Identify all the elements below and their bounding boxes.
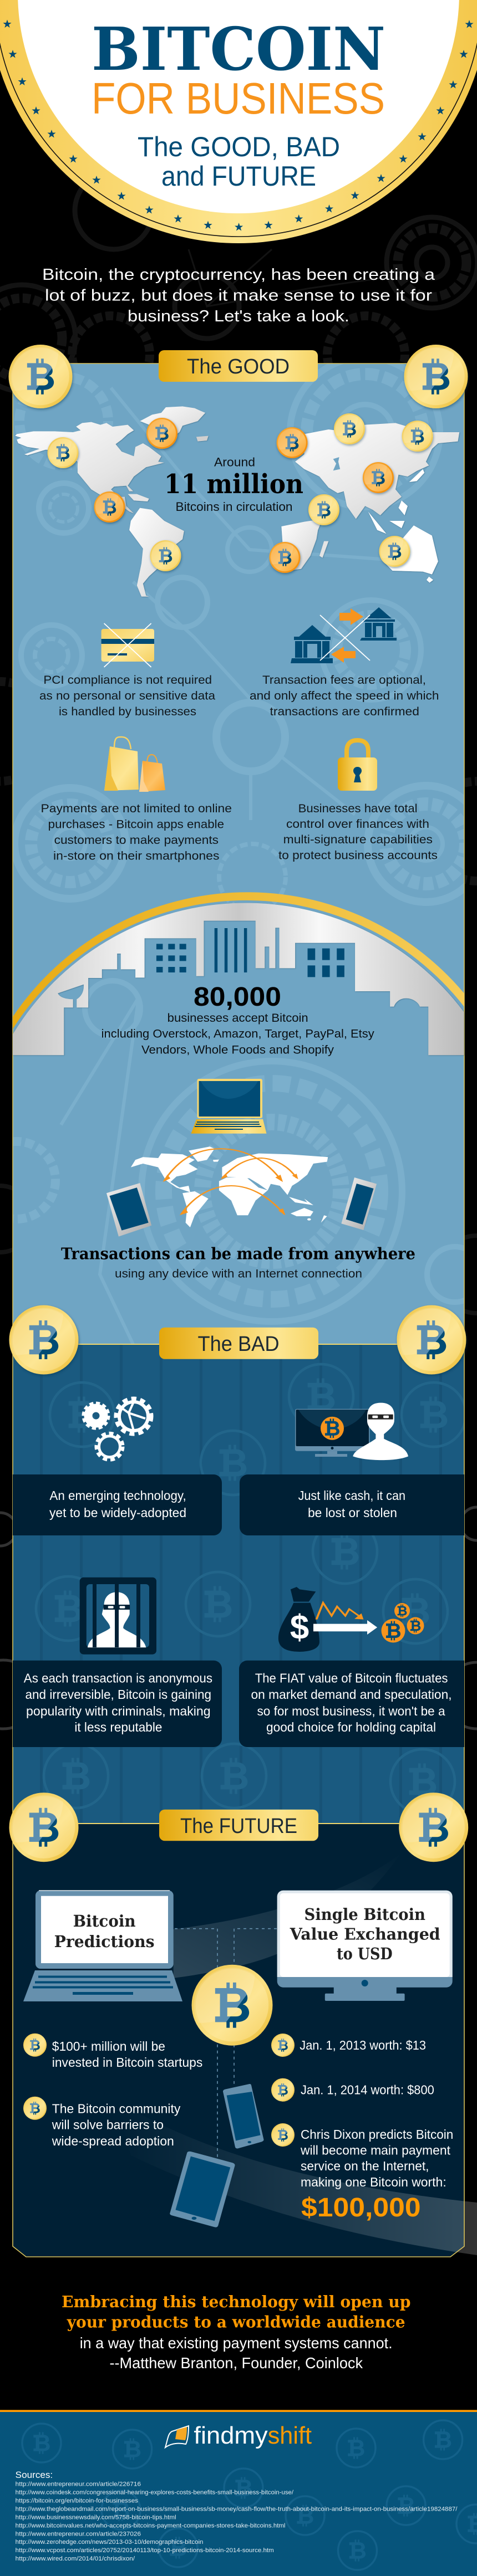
section header: the future: The FUTURE	[180, 1815, 297, 1838]
logo: findmyshift: findmy	[194, 2422, 268, 2449]
text: total control: to protect business accounts	[278, 849, 438, 862]
box: lost or stolen: be lost or stolen	[308, 1505, 397, 1520]
stat: 11 million: Bitcoins in circulation	[175, 500, 293, 514]
closing quote	[62, 2292, 410, 2372]
text: transaction fees: transactions are confirmed	[270, 705, 419, 718]
monitor: single bitcoin value: to USD	[337, 1944, 393, 1963]
title: FOR BUSINESS: FOR BUSINESS	[92, 74, 385, 123]
sources: http://www.entrepreneur.com/article/237026	[16, 2531, 141, 2538]
monitor: single bitcoin value: Value Exchanged	[290, 1925, 440, 1944]
title coin	[0, 0, 477, 243]
heading: transactions from anywhere: Transactions can be made from anywhere	[61, 1245, 415, 1263]
laptop: bitcoin predictions: Predictions	[54, 1932, 155, 1951]
closing quote: Embracing this technology will open up	[62, 2292, 410, 2311]
sources: http://www.zerohedge.com/news/2013-03-10/demographics-bitcoin	[16, 2539, 203, 2546]
icon: shopping bags	[104, 737, 165, 792]
prediction: community: will solve barriers to	[52, 2118, 164, 2132]
icon: money bag to bitcoin: $	[290, 1609, 309, 1647]
icon: banks with crossed transfer fee	[291, 607, 397, 663]
stat: 80,000 businesses: Vendors, Whole Foods and Shopify	[141, 1043, 334, 1057]
coin: bad left	[9, 1305, 79, 1374]
laptop: bitcoin predictions: Bitcoin	[73, 1912, 136, 1930]
box: lost or stolen: Just like cash, it can	[298, 1488, 405, 1503]
box: emerging technology: An emerging technology,	[49, 1488, 186, 1503]
text: payments: purchases - Bitcoin apps enable	[48, 818, 224, 831]
icon: thief behind bars	[80, 1578, 156, 1655]
text: transaction fees	[250, 673, 439, 718]
coin: future left	[9, 1793, 79, 1862]
box: lost or stolen	[240, 1474, 464, 1535]
logo: findmyshift: shift	[268, 2422, 312, 2449]
value: 2014: Jan. 1, 2014 worth: $800	[301, 2082, 434, 2097]
value: Chris Dixon prediction: making one Bitcoin worth:	[301, 2175, 446, 2189]
prediction: startups	[23, 2034, 202, 2070]
panel: the future	[13, 1824, 477, 2257]
text: PCI compliance	[39, 673, 215, 718]
panel: the bad	[13, 1344, 466, 1824]
intro text: business? Let's take a look.	[128, 308, 349, 325]
coin: good right	[404, 345, 468, 408]
closing quote: --Matthew Branton, Founder, Coinlock	[110, 2354, 363, 2372]
icon: money bag to bitcoin	[278, 1587, 424, 1652]
box: FIAT value: The FIAT value of Bitcoin fluctuates	[255, 1671, 448, 1686]
text: payments	[41, 802, 232, 863]
section header: the good	[159, 350, 318, 382]
subtitle: and FUTURE	[161, 161, 316, 192]
value: Chris Dixon prediction	[271, 2123, 453, 2222]
icon: tablet	[170, 2152, 235, 2227]
text: total control: multi-signature capabilities	[283, 833, 433, 846]
prediction: community: The Bitcoin community	[52, 2101, 181, 2116]
text: PCI compliance: PCI compliance is not required	[43, 673, 212, 687]
box: anonymous and irreversible: As each transaction is anonymous	[24, 1671, 212, 1686]
icon: gold laptop	[191, 1079, 266, 1134]
box: FIAT value: on market demand and speculation,	[251, 1687, 452, 1702]
box: FIAT value: so for most business, it won't be a	[257, 1704, 445, 1718]
closing quote: your products to a worldwide audience	[67, 2313, 405, 2332]
stat: 11 million: Around	[214, 455, 255, 469]
intro text: lot of buzz, but does it make sense to use it for	[45, 287, 432, 305]
box: anonymous and irreversible: and irreversible, Bitcoin is gaining	[26, 1687, 211, 1702]
stat: 80,000 businesses: including Overstock, Amazon, Target, PayPal, Etsy	[102, 1027, 374, 1041]
value: 2014	[271, 2078, 434, 2102]
icon: phone	[223, 2084, 264, 2148]
value: Chris Dixon prediction: will become main payment	[300, 2143, 451, 2158]
closing quote: in a way that existing payment systems cannot.	[80, 2334, 393, 2352]
section header: the bad: The BAD	[197, 1333, 280, 1356]
text: payments: customers to make payments	[54, 833, 219, 847]
sources: http://www.wired.com/2014/01/chrisdixon/	[16, 2555, 135, 2562]
sources: http://www.entrepreneur.com/article/226716	[16, 2481, 141, 2488]
laptop: bitcoin predictions	[23, 1891, 182, 2001]
prediction: startups: invested in Bitcoin startups	[52, 2055, 202, 2070]
box: anonymous and irreversible: it less reputable	[74, 1720, 162, 1734]
prediction: community: wide-spread adoption	[52, 2134, 174, 2148]
sources: http://www.coindesk.com/congressional-hearing-explores-costs-benefits-small-business-bitcoin-use/	[16, 2490, 294, 2496]
sources: http://www.vcpost.com/articles/20752/20140113/top-10-predictions-bitcoin-2014-source.htm	[16, 2547, 274, 2554]
icon: thief at monitor	[295, 1403, 408, 1460]
subtitle	[138, 131, 340, 192]
icon: crossed-out credit card	[102, 623, 154, 667]
text: total control: Businesses have total	[298, 802, 418, 815]
text: transaction fees: and only affect the speed in which	[250, 689, 439, 703]
box: anonymous and irreversible	[13, 1661, 222, 1747]
sources: http://www.theglobeandmail.com/report-on-business/small-business/sb-money/cash-flow/the-truth-about-bitcoin-and-its-impact-on-business/article19824887/	[16, 2506, 458, 2513]
prediction: startups: $100+ million will be	[52, 2039, 165, 2053]
logo: findmyshift	[165, 2422, 312, 2449]
sources: https://bitcoin.org/en/bitcoin-for-businesses	[16, 2498, 138, 2505]
stat: 80,000 businesses	[102, 982, 374, 1057]
sources: http://www.businessnewsdaily.com/5758-bitcoin-tips.html	[16, 2514, 176, 2521]
text: PCI compliance: is handled by businesses	[59, 705, 196, 718]
intro text	[42, 266, 435, 325]
coin: good left	[9, 345, 73, 408]
box: anonymous and irreversible: popularity with criminals, making	[26, 1704, 211, 1718]
map coins	[48, 413, 433, 573]
intro text: Bitcoin, the cryptocurrency, has been creating a	[42, 266, 435, 284]
monitor: single bitcoin value: Single Bitcoin	[304, 1905, 425, 1924]
illustration: city skyline dome	[13, 892, 464, 1055]
section header: the good: The GOOD	[187, 355, 290, 378]
divider line: good and bad	[13, 1344, 464, 1345]
box: emerging technology	[13, 1474, 222, 1535]
value: Chris Dixon prediction: service on the Internet,	[301, 2159, 429, 2173]
coin: future right	[399, 1793, 468, 1862]
stat: 80,000 businesses: 80,000	[194, 982, 281, 1012]
panel border	[13, 363, 464, 2257]
value: Chris Dixon prediction: Chris Dixon predicts Bitcoin	[301, 2127, 453, 2142]
text: payments: in-store on their smartphones	[53, 849, 220, 863]
stat: 11 million	[164, 455, 303, 514]
value: 2013: Jan. 1, 2013 worth: $13	[300, 2038, 426, 2052]
subtitle: The GOOD, BAD	[138, 131, 340, 162]
title: BITCOIN: BITCOIN	[92, 15, 385, 84]
connector: dashed lines	[175, 1929, 277, 2157]
footer	[0, 2410, 477, 2576]
text: transaction fees: Transaction fees are optional,	[262, 673, 426, 687]
section header: the future	[159, 1810, 318, 1841]
stat: 11 million: 11 million	[164, 469, 303, 500]
monitor: single bitcoin value	[277, 1891, 453, 2001]
value: 2013	[271, 2034, 426, 2057]
sources: Sources:	[16, 2470, 53, 2480]
box: emerging technology: yet to be widely-adopted	[49, 1505, 186, 1520]
coin: bad right	[397, 1305, 466, 1374]
prediction: community	[23, 2097, 181, 2148]
text: total control: control over finances with	[286, 817, 429, 831]
text: PCI compliance: as no personal or sensitive data	[39, 689, 215, 703]
text: using any device: using any device with an Internet connection	[115, 1267, 362, 1281]
icon: padlock	[338, 740, 377, 791]
sources	[16, 2470, 458, 2562]
divider line: bad and future	[13, 1823, 464, 1824]
stat: 80,000 businesses: businesses accept Bitcoin	[168, 1011, 308, 1025]
illustration: world map with arcs and devices	[106, 1146, 377, 1237]
text: total control	[278, 802, 438, 862]
section header: the bad	[159, 1328, 318, 1359]
value: Chris Dixon prediction: $100,000	[301, 2193, 421, 2222]
box: FIAT value: good choice for holding capital	[266, 1720, 436, 1734]
box: FIAT value	[239, 1661, 464, 1747]
text: payments: Payments are not limited to online	[41, 802, 232, 815]
coin: future centre	[192, 1965, 273, 2046]
panel: the good	[0, 357, 477, 1344]
world map	[15, 406, 459, 597]
sources: http://www.bitcoinvalues.net/who-accepts-bitcoins-payment-companies-stores-take-bitcoins.html	[16, 2523, 285, 2529]
icon: gears	[84, 1399, 151, 1460]
